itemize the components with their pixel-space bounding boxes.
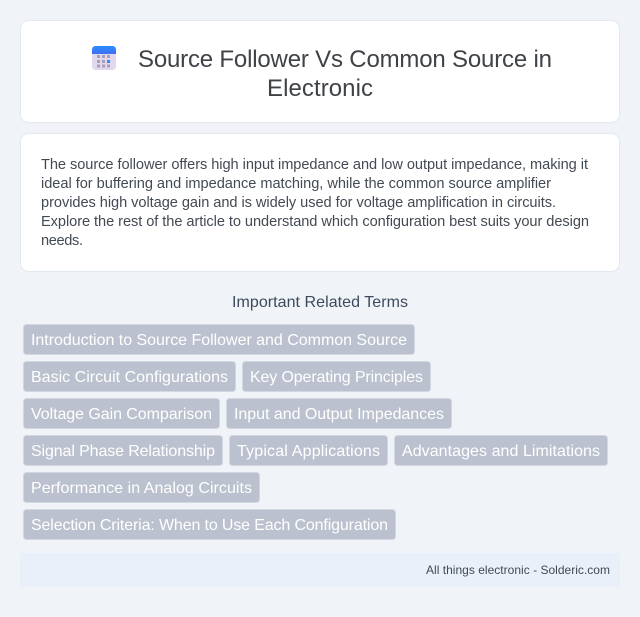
title: Source Follower Vs Common Source in: [138, 46, 552, 73]
tag: introduction: Introduction to Source Follower and Common Source: [31, 332, 407, 349]
panel: header: [20, 20, 620, 122]
tag: selection criteria: Selection Criteria: When to Use Each Configuration: [31, 517, 388, 534]
tag: basic circuit: [24, 362, 236, 392]
tag: impedances: Input and Output Impedances: [234, 406, 444, 423]
text block: description: needs.: [41, 233, 83, 249]
tag: performance: [24, 472, 260, 502]
tag: basic circuit: Basic Circuit Configurations: [31, 369, 228, 386]
tag: selection criteria: [24, 510, 396, 540]
icon: calendar: [92, 46, 116, 70]
text block: description: The source follower offers high input impedance and low output impedance, making it: [41, 157, 588, 173]
tag: advantages: Advantages and Limitations: [402, 443, 600, 460]
tag: impedances: [226, 398, 452, 428]
tag: applications: [230, 436, 388, 466]
tag: applications: Typical Applications: [237, 443, 380, 460]
tag: key operating: [242, 362, 430, 392]
footer: [20, 553, 620, 587]
tag: key operating: Key Operating Principles: [250, 369, 423, 386]
title: [138, 46, 552, 102]
tag list: [24, 324, 608, 540]
text block: description: Explore the rest of the article to understand which configuration best suits your design: [41, 214, 589, 230]
tag: performance: Performance in Analog Circuits: [31, 480, 252, 497]
tag: advantages: [394, 436, 608, 466]
title: Electronic: [267, 75, 373, 102]
tag: voltage gain: [24, 398, 220, 428]
text block: description: provides high voltage gain and is widely used for voltage amplification in circuits.: [41, 195, 556, 211]
tag: introduction: [24, 324, 414, 354]
tag: signal phase: [24, 436, 222, 466]
text block: description: ideal for buffering and impedance matching, while the common source amplifier: [41, 176, 551, 192]
tag: signal phase: Signal Phase Relationship: [31, 443, 215, 460]
footer: All things electronic - Solderic.com: [426, 563, 610, 577]
heading: important related terms: Important Related Terms: [232, 294, 408, 311]
panel: description: [20, 134, 620, 272]
text block: description: [41, 157, 589, 249]
tag: voltage gain: Voltage Gain Comparison: [31, 406, 212, 423]
